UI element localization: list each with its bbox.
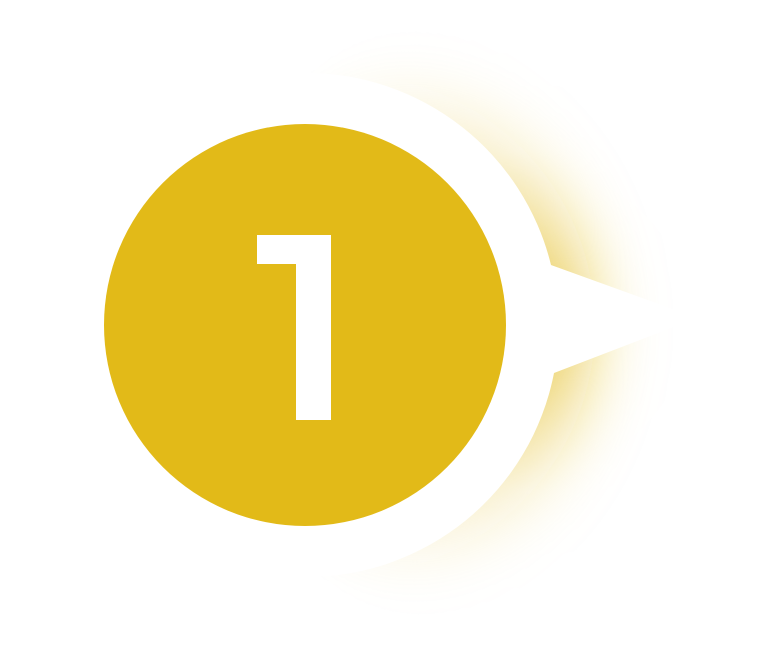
numeral 1: 1: [238, 177, 388, 477]
white pointer badge backing: [53, 73, 692, 577]
gold number circle: [104, 124, 506, 526]
numbered badge graphic: [104, 74, 640, 573]
soft golden shadow: [372, 74, 640, 573]
numeral 1: [257, 235, 331, 420]
